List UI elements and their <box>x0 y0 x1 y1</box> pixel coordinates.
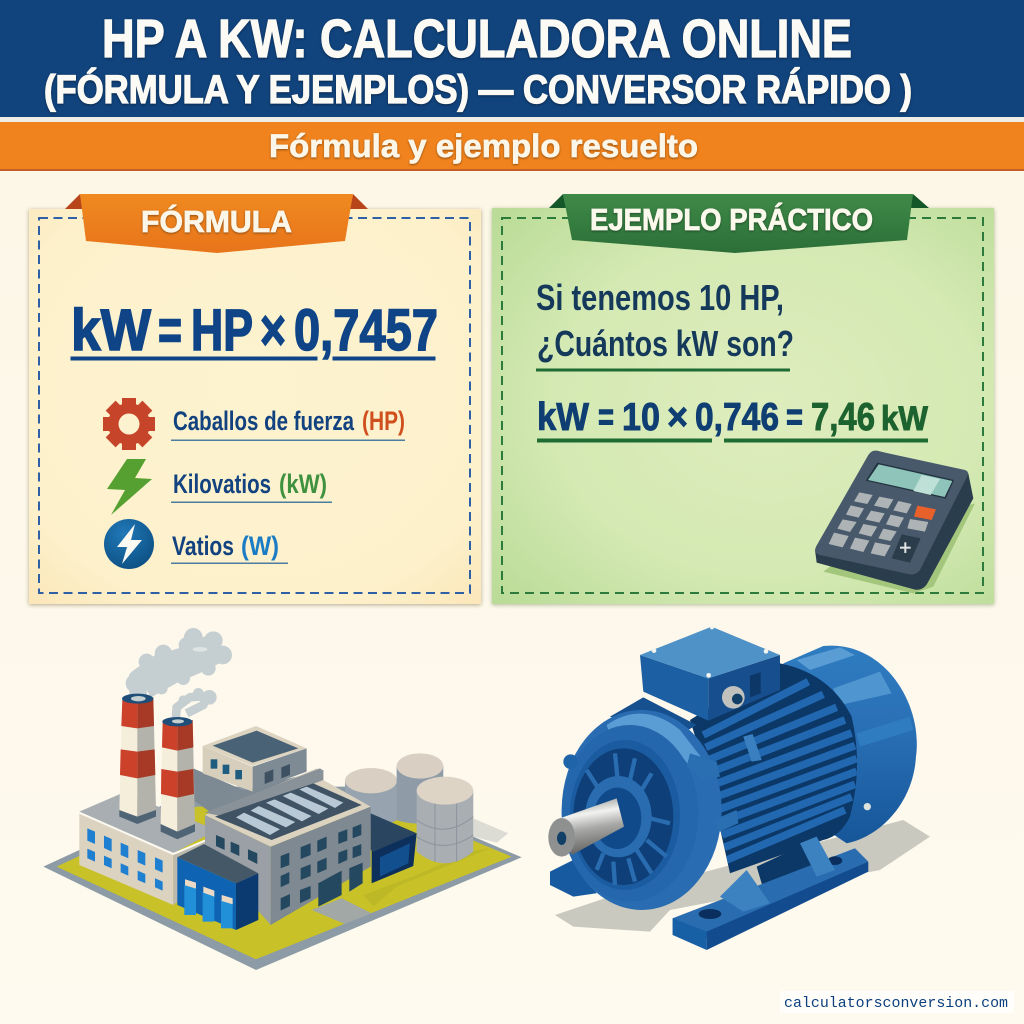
legend: caballos de fuerza: Caballos de fuerza <box>173 406 355 436</box>
legend: kilovatios: Kilovatios <box>173 469 271 499</box>
legend: vatios <box>171 531 288 564</box>
chimney one <box>119 694 156 824</box>
subtitle strip: Fórmula y ejemplo resuelto <box>269 128 698 164</box>
formula: = <box>158 298 182 363</box>
worked calculation: 0,746 <box>695 396 779 439</box>
factory ground <box>43 787 522 970</box>
factory left block <box>79 793 217 905</box>
worked calculation: kW <box>537 396 589 439</box>
chimney smoke <box>126 628 232 717</box>
subtitle strip <box>0 122 1024 171</box>
icon: calculator <box>815 451 975 593</box>
title: (FÓRMULA Y EJEMPLOS) — CONVERSOR RÁPIDO ) <box>44 66 912 112</box>
formula: HP <box>191 298 253 363</box>
chimney two <box>161 717 195 839</box>
ribbon: fórmula: FÓRMULA <box>141 203 292 239</box>
legend: vatios: (W) <box>241 531 279 561</box>
title: HP A KW: CALCULADORA ONLINE <box>102 9 852 69</box>
icon: blue circle bolt <box>104 519 154 569</box>
panel: fórmula <box>29 194 481 604</box>
formula: kW <box>71 298 151 363</box>
worked calculation: 7,46 <box>811 396 875 439</box>
worked calculation: 10 <box>622 396 660 439</box>
motor shaft <box>548 798 624 857</box>
factory blue annex <box>177 844 258 930</box>
ribbon: ejemplo práctico: EJEMPLO PRÁCTICO <box>590 202 873 237</box>
question text: Si tenemos 10 HP, <box>536 277 784 318</box>
illustration: factory <box>43 628 522 970</box>
legend: caballos de fuerza: (HP) <box>362 406 405 436</box>
illustration: electric motor <box>548 625 930 950</box>
legend: kilovatios: (kW) <box>279 469 327 499</box>
formula: 0,7457 <box>294 298 438 363</box>
motor front bell <box>562 710 738 910</box>
worked calculation: kW <box>881 400 929 438</box>
motor shadow <box>555 820 930 932</box>
legend: vatios: Vatios <box>172 531 234 561</box>
motor finned body <box>610 663 857 873</box>
ribbon: ejemplo práctico <box>549 194 929 253</box>
motor base <box>550 843 868 950</box>
worked calculation: = <box>598 396 614 439</box>
website watermark: calculatorsconversion.com <box>784 995 1008 1012</box>
question text: ¿Cuántos kW son? <box>537 323 794 364</box>
icon: green lightning <box>107 459 152 515</box>
motor rear cover <box>783 646 917 843</box>
title <box>44 9 912 112</box>
question text <box>536 277 794 372</box>
ribbon: fórmula <box>65 194 368 253</box>
header banner <box>0 0 1024 122</box>
factory rear annex <box>371 813 417 883</box>
factory storage tanks <box>345 753 473 863</box>
worked calculation: = <box>786 396 803 439</box>
icon: gear <box>103 398 155 450</box>
formula: × <box>260 298 286 363</box>
motor terminal box <box>640 625 780 721</box>
factory rear building <box>193 726 323 817</box>
worked calculation: × <box>667 396 688 439</box>
motor feet supports <box>720 837 835 912</box>
worked calculation <box>537 396 929 442</box>
formula <box>71 298 438 363</box>
factory main building <box>205 768 371 925</box>
panel: ejemplo práctico <box>492 194 994 604</box>
